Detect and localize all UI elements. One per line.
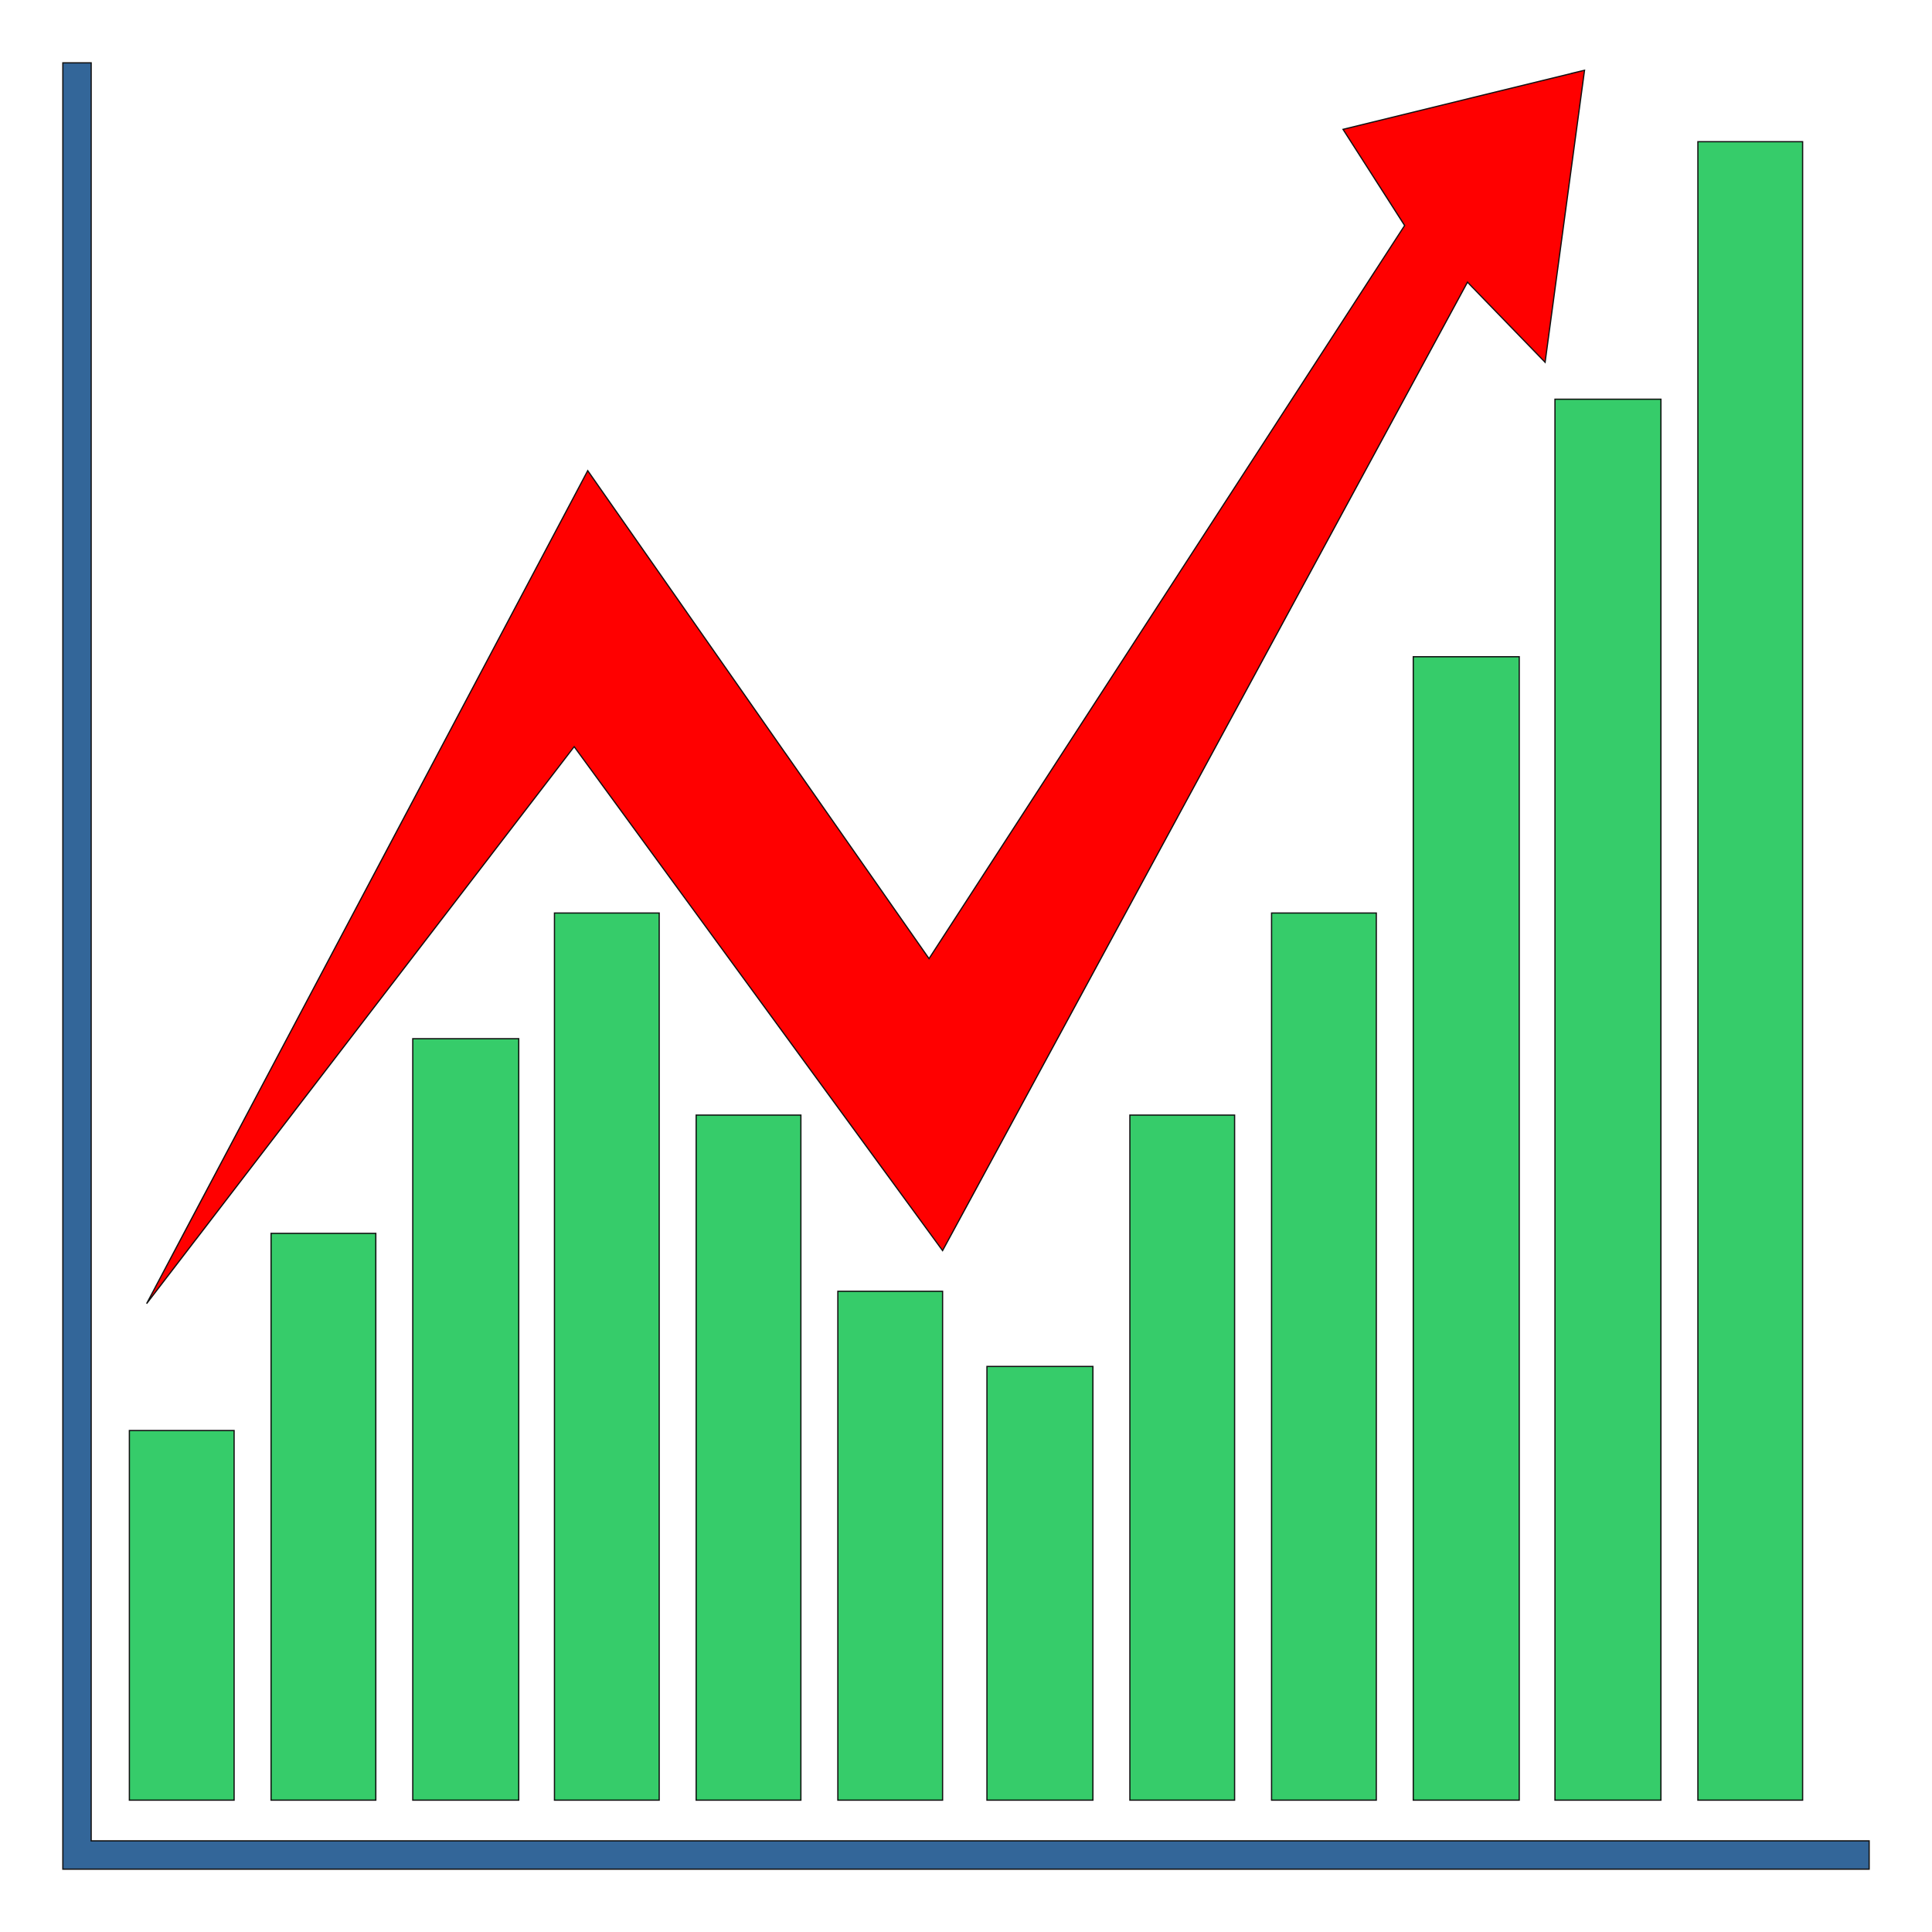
bars bbox=[129, 141, 1803, 1800]
arrow: red trend arrow bbox=[147, 70, 1584, 1304]
